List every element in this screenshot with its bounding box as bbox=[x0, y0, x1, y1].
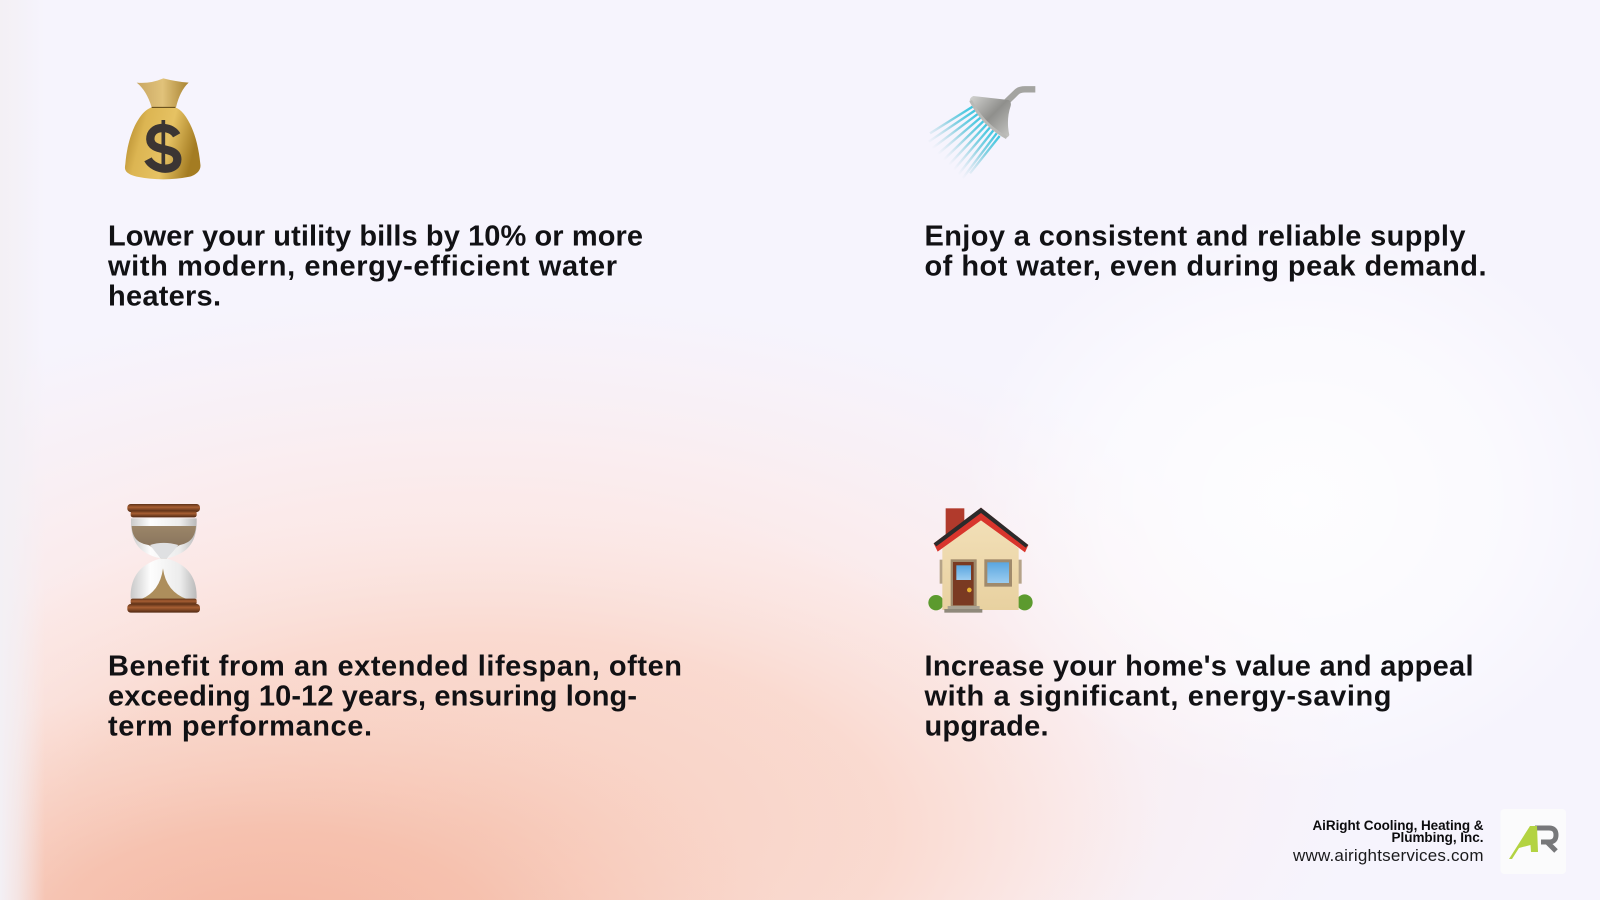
text: lower utility bills: Lower your utility bills by 10% or more bbox=[108, 220, 643, 252]
text: extended lifespan: Benefit from an extended lifespan, often bbox=[108, 650, 682, 682]
footer: company branding bbox=[1292, 809, 1566, 874]
panel: extended lifespan bbox=[108, 504, 682, 742]
panel: reliable hot water bbox=[924, 89, 1486, 283]
text: home value: Increase your home's value and appeal bbox=[924, 650, 1474, 682]
company name bbox=[1312, 818, 1484, 845]
icon: hourglass bbox=[127, 504, 200, 613]
text: home value: upgrade. bbox=[924, 710, 1048, 742]
text: reliable hot water bbox=[924, 220, 1486, 282]
text: lower utility bills: heaters. bbox=[108, 280, 221, 312]
text: lower utility bills bbox=[107, 220, 643, 312]
text: extended lifespan bbox=[108, 650, 682, 742]
text: reliable hot water: Enjoy a consistent and reliable supply bbox=[924, 220, 1466, 252]
text: home value bbox=[924, 650, 1474, 742]
text: home value: with a significant, energy-saving bbox=[924, 680, 1392, 712]
logo bbox=[1500, 809, 1566, 874]
icon: money bag bbox=[125, 78, 200, 179]
text: extended lifespan: term performance. bbox=[108, 710, 372, 742]
panel: home value bbox=[924, 508, 1474, 742]
text: extended lifespan: exceeding 10-12 years, ensuring long- bbox=[108, 680, 637, 712]
text: lower utility bills: with modern, energy-efficient water bbox=[107, 250, 617, 282]
panel: lower utility bills bbox=[107, 78, 643, 312]
icon: shower head bbox=[929, 89, 1035, 178]
website url: www.airightservices.com bbox=[1292, 846, 1484, 865]
company name: AiRight Cooling, Heating & bbox=[1312, 818, 1484, 833]
icon: house bbox=[928, 508, 1033, 613]
text: reliable hot water: of hot water, even during peak demand. bbox=[924, 250, 1486, 282]
company name: Plumbing, Inc. bbox=[1392, 830, 1484, 845]
